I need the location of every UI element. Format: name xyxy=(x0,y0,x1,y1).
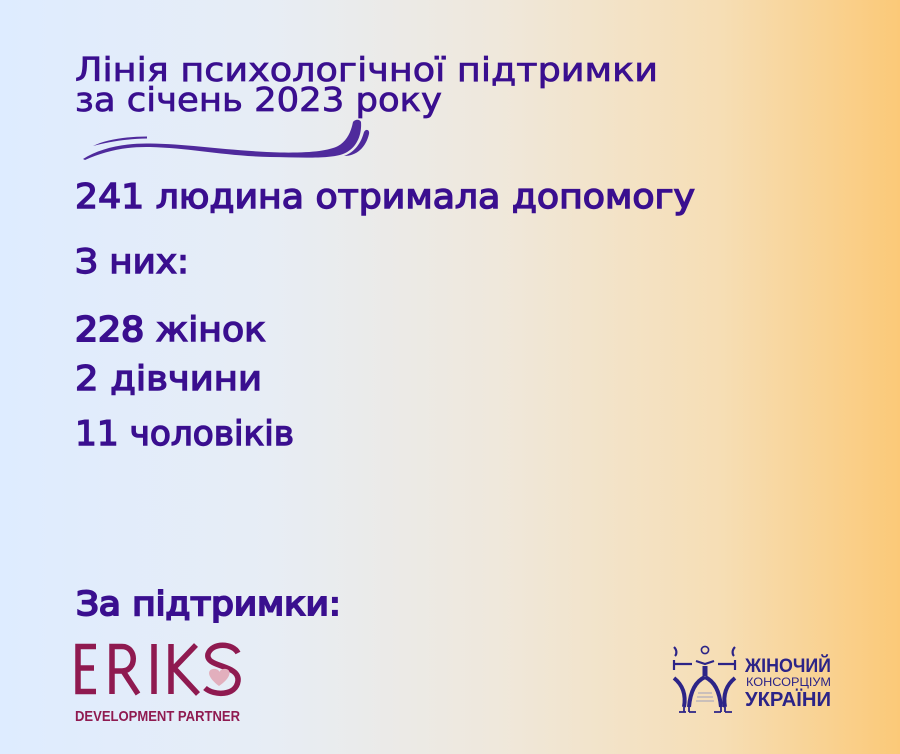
logo: ERIKS Development Partner: DEVELOPMENT PARTNER xyxy=(75,708,240,725)
subheading: З них: xyxy=(75,242,189,282)
stat: men: 11 чоловіків xyxy=(75,414,294,454)
title xyxy=(75,50,658,119)
support heading: За підтримки: xyxy=(76,584,341,623)
logo emblem xyxy=(674,646,735,712)
title: Лінія психологічної підтримки xyxy=(75,50,658,89)
stat: girls: 2 дівчини xyxy=(75,359,262,399)
decorative brush underline xyxy=(83,120,369,160)
title: за січень 2023 року xyxy=(75,80,442,119)
logo: Women's Consortium of Ukraine: УКРАЇНИ xyxy=(745,688,831,711)
logo: Women's Consortium of Ukraine: ЖІНОЧИЙ xyxy=(744,655,831,677)
logo: Women's Consortium of Ukraine xyxy=(674,646,831,712)
logo: ERIKS Development Partner xyxy=(75,644,240,725)
headline: total helped: 241 людина отримала допомогу xyxy=(75,177,695,217)
logo: Women's Consortium of Ukraine: КОНСОРЦІУМ xyxy=(746,675,831,689)
stat: women: 228 жінок xyxy=(75,310,266,350)
